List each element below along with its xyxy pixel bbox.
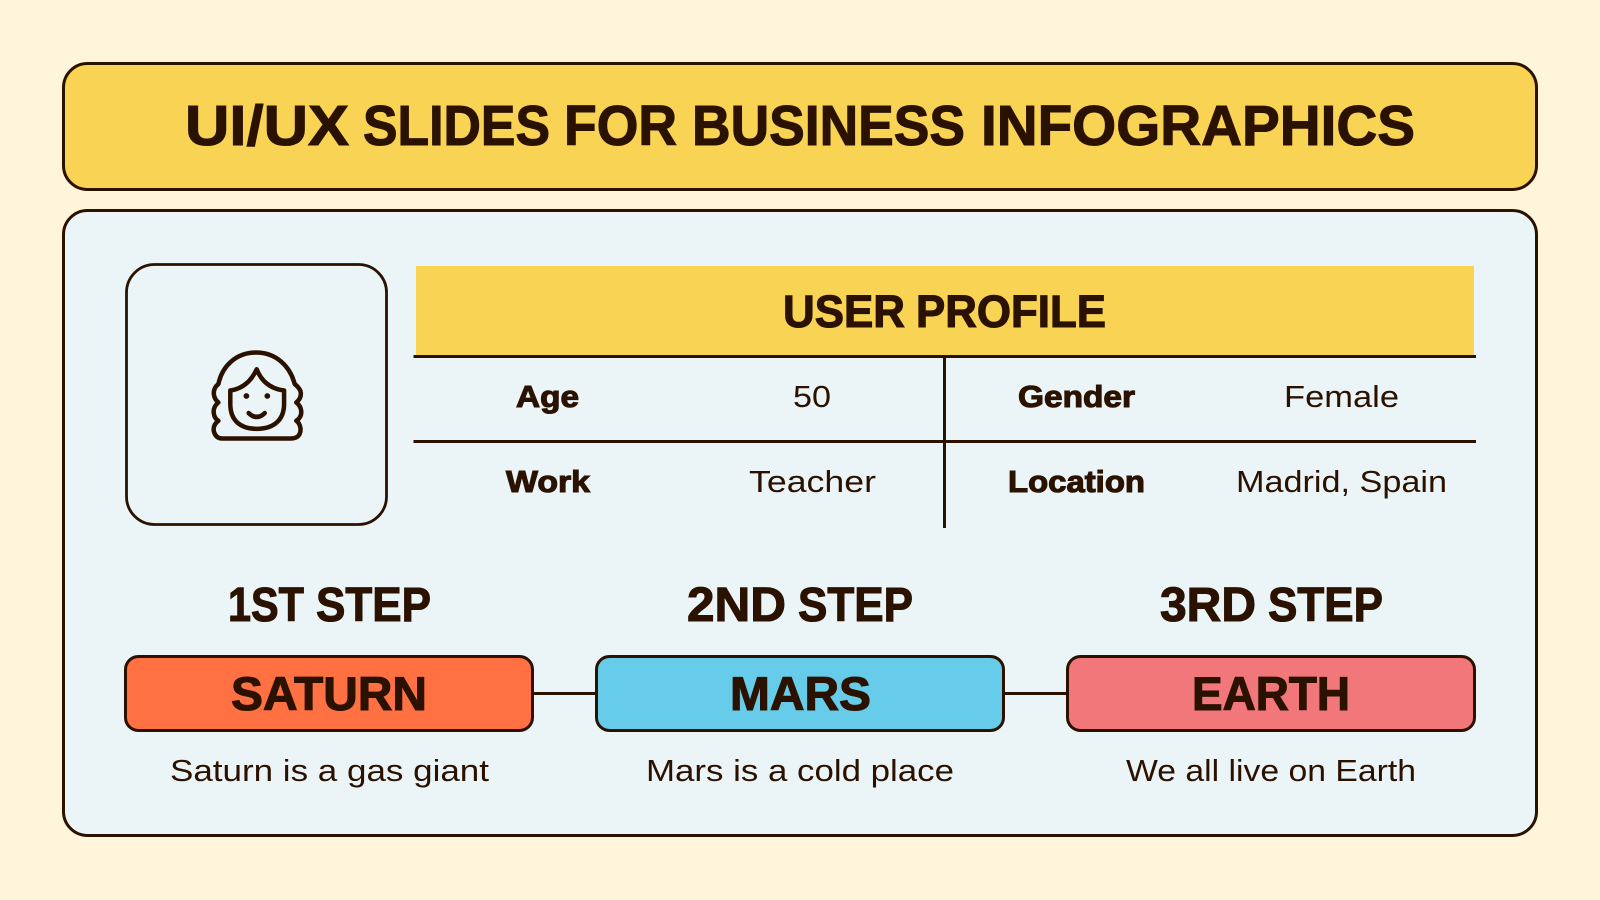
label: gender: Gender [1018,379,1135,414]
label: work: Work [506,464,591,499]
table heading: PROFILE [916,286,1106,337]
table heading [783,286,1106,337]
step description: We all live on Earth [1126,753,1416,788]
step heading [228,579,431,632]
value: work: Teacher [749,464,876,499]
step heading [687,579,913,632]
step heading [1160,579,1383,632]
step heading: 2ND [687,579,786,632]
step 1: Saturn [126,579,532,788]
connector: step 1 to step 2 [533,692,596,695]
table grid lines [414,355,1476,528]
step name: EARTH [1192,667,1350,720]
step name: MARS [730,667,871,720]
connector: step 2 to step 3 [1004,692,1067,695]
icon: woman avatar [214,353,301,439]
title: BUSINESS [692,94,965,158]
panel: user profile table [414,266,1476,528]
panel: avatar card [126,264,386,524]
step name: SATURN [231,667,427,720]
step heading: 1ST [228,579,304,632]
step heading: STEP [798,579,913,632]
title: FOR [564,94,677,158]
step 3: Earth [1068,579,1474,788]
step bar [126,656,532,730]
value: gender: Female [1284,379,1399,414]
label: location: Location [1008,464,1145,499]
step heading: STEP [316,579,431,632]
table heading: USER [783,286,905,337]
title: INFOGRAPHICS [981,94,1415,158]
value: location: Madrid, Spain [1236,464,1447,499]
title banner [64,64,1536,190]
title: SLIDES [363,94,550,158]
step description: Saturn is a gas giant [170,753,489,788]
panel: main content [64,210,1536,836]
table header [416,266,1474,356]
step heading: STEP [1268,579,1383,632]
label: age: Age [516,379,579,414]
step description: Mars is a cold place [646,753,954,788]
step bar [596,656,1004,730]
value: age: 50 [793,379,831,414]
title [185,94,1415,158]
step heading: 3RD [1160,579,1256,632]
step 2: Mars [596,579,1004,788]
step bar [1068,656,1474,730]
title: UI/UX [185,94,349,158]
